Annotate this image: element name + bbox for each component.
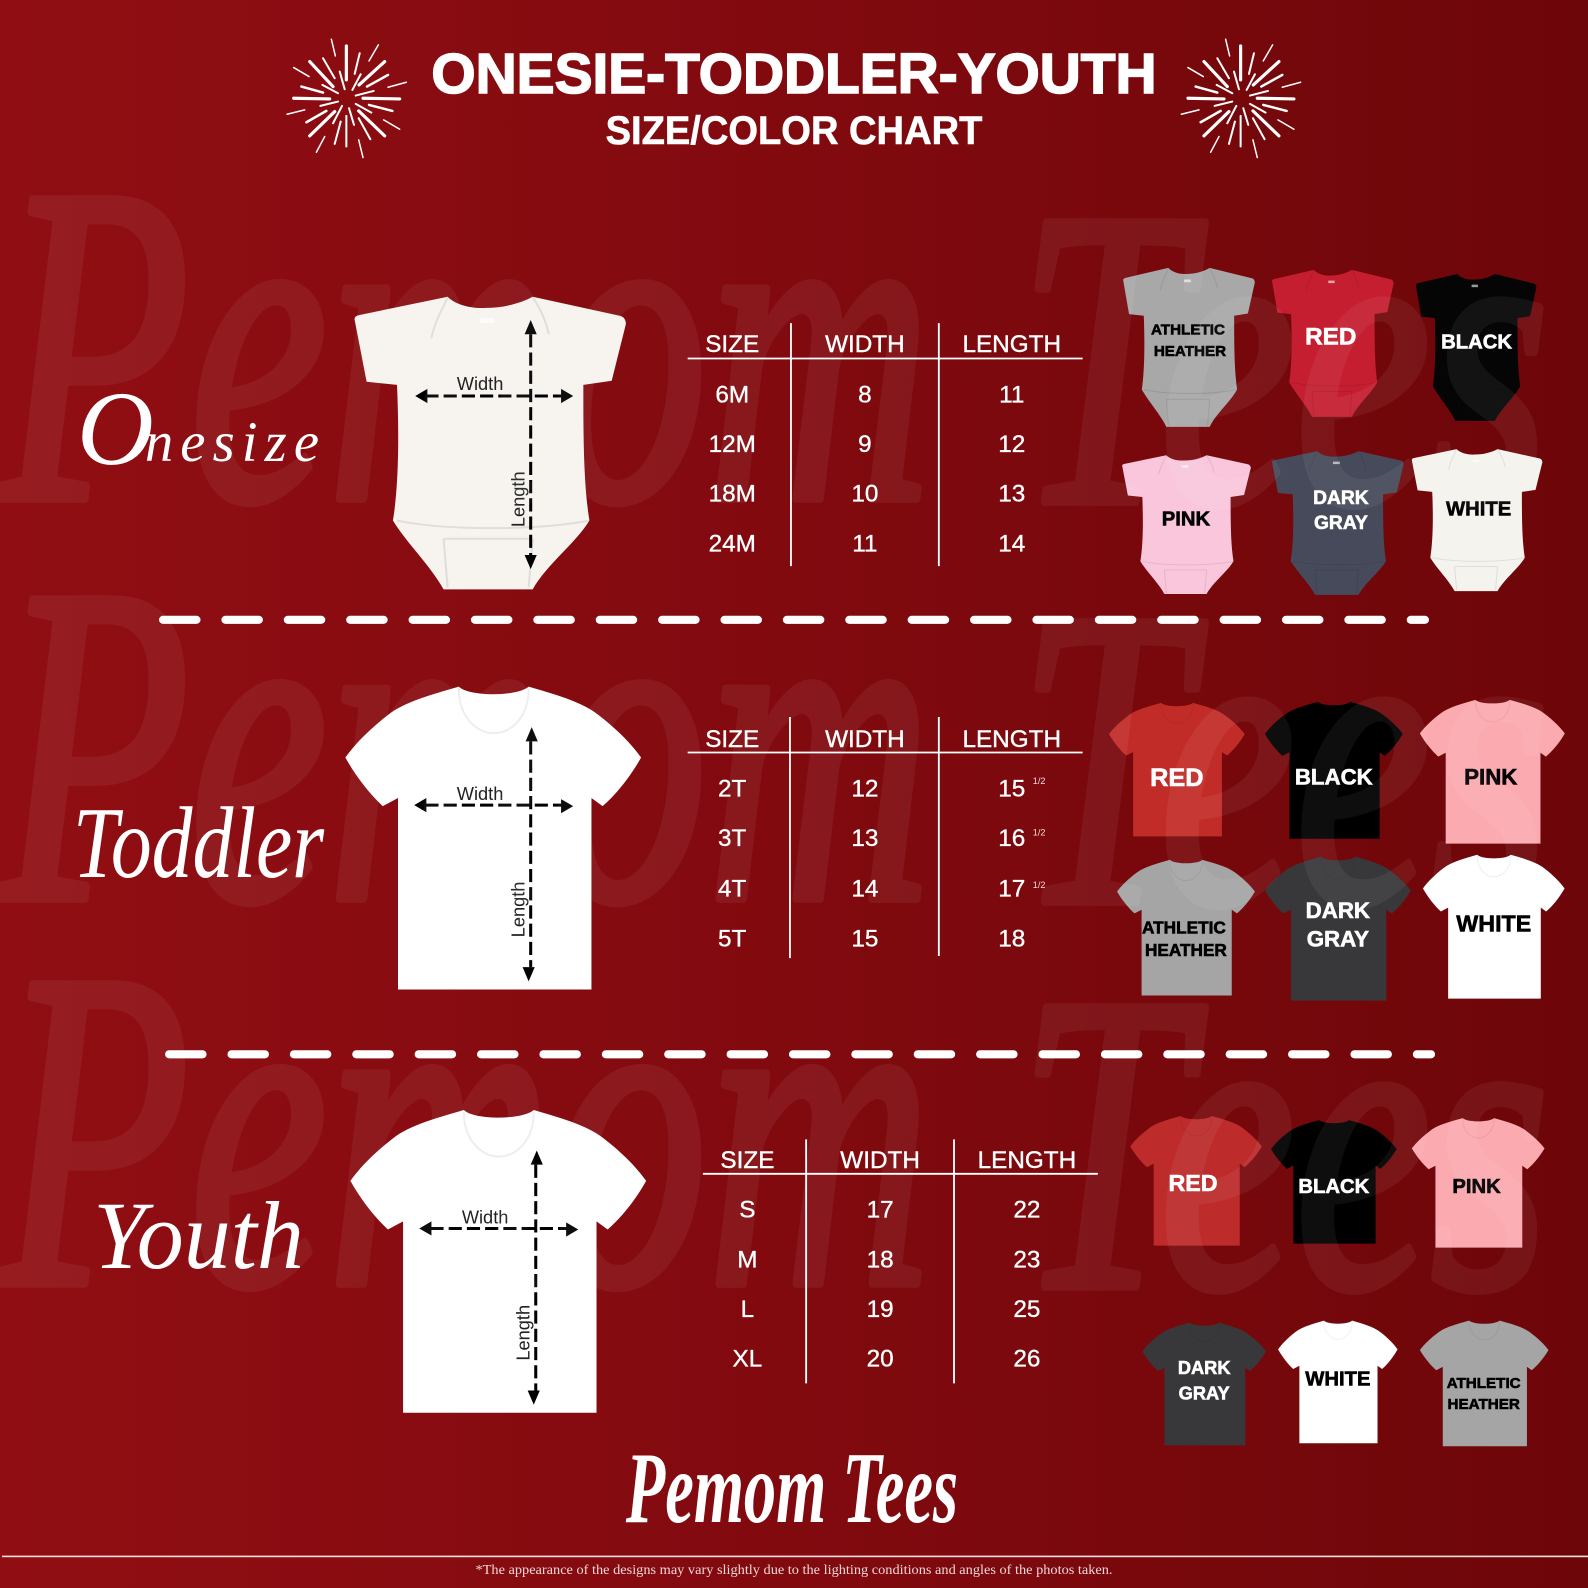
garment: large youth tee with measures: Length — [514, 1305, 534, 1361]
swatches: onesie colors: DARK — [1313, 488, 1369, 509]
table: onesize sizes: SIZE — [705, 331, 759, 358]
swatches: toddler colors: GRAY — [1307, 926, 1369, 951]
footer rule — [2, 1556, 1588, 1557]
watermark: repeated brand name — [0, 92, 1550, 1382]
table: toddler sizes: 4T — [718, 876, 747, 903]
table: youth sizes: SIZE — [720, 1147, 774, 1174]
heading: Onesize — [77, 370, 319, 488]
table: youth sizes: 23 — [1013, 1246, 1040, 1273]
garment: large youth tee with measures: Width — [462, 1207, 508, 1227]
table: onesize sizes: 6M — [715, 381, 749, 408]
divider 2 — [169, 1050, 1431, 1058]
swatches: youth colors: RED — [1168, 1170, 1218, 1196]
swatches: toddler colors: RED — [1150, 764, 1204, 792]
table: toddler sizes: 13 — [851, 825, 878, 852]
swatches: youth colors: ATHLETIC — [1447, 1375, 1521, 1392]
swatches: youth colors: PINK — [1452, 1176, 1501, 1198]
table: youth sizes: 26 — [1013, 1346, 1040, 1373]
table: youth sizes: M — [737, 1246, 758, 1273]
heading: Onesize: O — [77, 370, 154, 488]
table: onesize sizes: 9 — [858, 431, 872, 458]
garment: large onesie with measures: Length — [509, 471, 529, 527]
table: youth sizes: LENGTH — [978, 1147, 1076, 1174]
watermark: repeated brand name: Pemom — [0, 92, 932, 597]
swatches: onesie colors: BLACK — [1441, 331, 1512, 353]
table: youth sizes: 19 — [867, 1296, 894, 1323]
table: onesize sizes: 18M — [709, 481, 756, 508]
swatches: onesie colors: HEATHER — [1154, 343, 1226, 360]
garment: large youth tee with measures — [350, 1110, 646, 1413]
watermark: repeated brand name: Pemom — [0, 877, 932, 1382]
table: toddler sizes: 1/2 — [1033, 776, 1045, 786]
section: toddler — [73, 687, 1565, 1001]
table: toddler sizes: 1/2 — [1033, 880, 1045, 890]
section: onesize — [77, 268, 1542, 595]
table: toddler sizes: 3T — [718, 825, 747, 852]
table: toddler sizes: 12 — [851, 775, 878, 802]
divider 1 — [163, 616, 1425, 624]
table: onesize sizes — [688, 323, 1083, 566]
swatches: toddler colors: BLACK — [1295, 764, 1373, 789]
table: onesize sizes: 13 — [998, 481, 1025, 508]
swatches: toddler colors — [1109, 700, 1565, 1001]
table: youth sizes: 17 — [867, 1197, 894, 1224]
table: onesize sizes: 12 — [998, 431, 1025, 458]
garment: large toddler tee with measures: Length — [509, 882, 529, 937]
heading: Onesize: nesize — [145, 411, 319, 474]
swatches: youth colors: DARK — [1178, 1358, 1230, 1378]
swatches: onesie colors: ATHLETIC — [1151, 322, 1225, 339]
garment: large toddler tee with measures: Width — [457, 784, 503, 804]
table: toddler sizes: 5T — [718, 925, 747, 952]
footnote: *The appearance of the designs may vary slightly due to the lighting conditions and angles of the photos taken. — [475, 1562, 1113, 1577]
table: toddler sizes: 15 — [998, 775, 1025, 802]
table: onesize sizes: 24M — [709, 530, 756, 557]
table: toddler sizes — [688, 717, 1083, 958]
swatches: toddler colors: WHITE — [1456, 911, 1531, 937]
swatches: toddler colors: PINK — [1464, 764, 1517, 789]
swatches: onesie colors: RED — [1305, 324, 1356, 351]
table: toddler sizes: 17 — [998, 876, 1025, 903]
table: toddler sizes: SIZE — [705, 726, 759, 753]
icon: firework left — [287, 39, 406, 158]
heading: Toddler: Toddler — [73, 787, 325, 899]
table: toddler sizes: WIDTH — [825, 726, 905, 753]
table: onesize sizes: 11 — [852, 530, 878, 557]
table: youth sizes: 22 — [1013, 1197, 1040, 1224]
swatches: onesie colors: GRAY — [1314, 513, 1368, 534]
table: onesize sizes: WIDTH — [825, 331, 905, 358]
swatches: youth colors: WHITE — [1305, 1368, 1370, 1390]
swatches: onesie colors: PINK — [1162, 509, 1210, 531]
table: youth sizes: 18 — [867, 1246, 894, 1273]
swatches: toddler colors: HEATHER — [1145, 940, 1227, 960]
watermark: repeated brand name: Pemom — [0, 492, 932, 997]
swatches: youth colors: BLACK — [1298, 1176, 1370, 1198]
swatches: toddler colors: ATHLETIC — [1142, 918, 1226, 938]
swatches: onesie colors — [1122, 268, 1542, 595]
table: onesize sizes: 8 — [858, 381, 872, 408]
table: youth sizes — [703, 1139, 1098, 1383]
table: onesize sizes: LENGTH — [962, 331, 1061, 358]
main title: ONESIE-TODDLER-YOUTH — [431, 43, 1157, 106]
brand name: Pemom Tees — [625, 1432, 958, 1544]
table: youth sizes: 25 — [1013, 1296, 1040, 1323]
title block — [287, 39, 1301, 158]
table: youth sizes: WIDTH — [840, 1147, 920, 1174]
table: youth sizes: L — [741, 1296, 754, 1323]
subtitle: SIZE/COLOR CHART — [606, 109, 982, 153]
table: onesize sizes: 10 — [851, 481, 878, 508]
table: youth sizes: 20 — [867, 1346, 894, 1373]
table: toddler sizes: 2T — [718, 775, 747, 802]
table: toddler sizes: 1/2 — [1033, 828, 1045, 838]
table: onesize sizes: 12M — [709, 431, 756, 458]
garment: large onesie with measures — [354, 297, 626, 589]
section: youth — [93, 1110, 1549, 1446]
table: toddler sizes: LENGTH — [962, 726, 1061, 753]
swatches: onesie colors: WHITE — [1446, 498, 1511, 520]
swatches: youth colors: HEATHER — [1448, 1396, 1520, 1413]
heading: Youth: Youth — [93, 1182, 304, 1289]
swatches: youth colors — [1130, 1116, 1549, 1446]
table: youth sizes: S — [739, 1197, 756, 1224]
table: onesize sizes: 11 — [999, 381, 1024, 408]
table: toddler sizes: 14 — [851, 876, 878, 903]
swatches: youth colors: GRAY — [1179, 1384, 1230, 1404]
table: toddler sizes: 18 — [998, 925, 1025, 952]
table: toddler sizes: 15 — [851, 925, 878, 952]
table: youth sizes: XL — [733, 1346, 762, 1373]
swatches: toddler colors: DARK — [1306, 898, 1370, 923]
table: onesize sizes: 14 — [998, 530, 1025, 557]
garment: large toddler tee with measures — [345, 687, 641, 989]
table: toddler sizes: 16 — [998, 825, 1025, 852]
garment: large onesie with measures: Width — [457, 374, 503, 394]
icon: firework right — [1181, 39, 1301, 158]
